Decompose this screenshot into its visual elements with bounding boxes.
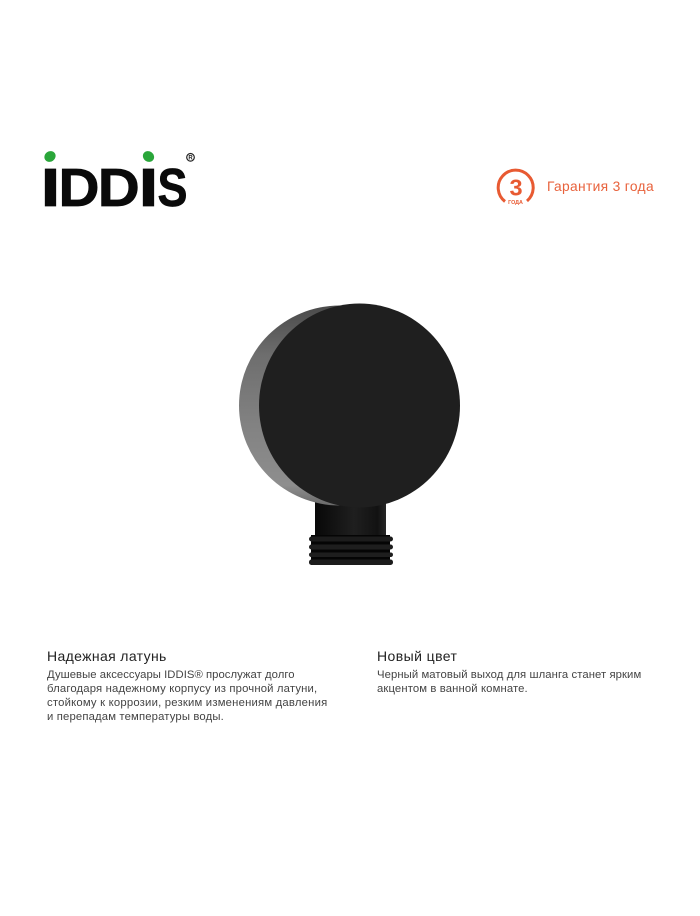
body: new colour: Черный матовый выход для шланга станет ярким [377, 669, 641, 681]
body: brass: и перепадам температуры воды. [47, 711, 224, 723]
product: matte black hose outlet [239, 304, 460, 565]
text block: new colour [377, 648, 641, 695]
body: new colour [377, 669, 641, 695]
registered mark [187, 154, 194, 162]
heading: new colour: Новый цвет [377, 648, 457, 664]
neck [315, 495, 386, 538]
body: brass: благодаря надежному корпусу из прочной латуни, [47, 683, 317, 695]
logo: IDDIS [40, 151, 195, 212]
warranty label: Гарантия 3 года [547, 179, 654, 194]
threaded connector [309, 535, 393, 565]
icon: 3 year ring: 3 [509, 174, 523, 200]
body side [239, 306, 441, 506]
logo green dots [42, 149, 156, 164]
heading: brass: Надежная латунь [47, 648, 167, 664]
body: brass [47, 669, 327, 723]
logo letters [40, 158, 188, 218]
icon: 3 year ring [498, 170, 533, 206]
body: new colour: акцентом в ванной комнате. [377, 683, 528, 695]
warranty badge [496, 168, 654, 206]
body: brass: Душевые аксессуары IDDIS® прослужат долго [47, 669, 295, 681]
registered mark: R [188, 156, 193, 162]
round face [259, 304, 460, 508]
text block: brass [47, 648, 327, 723]
body: brass: стойкому к коррозии, резким изменениям давления [47, 697, 327, 709]
icon: 3 year ring: ГОДА [508, 200, 523, 206]
